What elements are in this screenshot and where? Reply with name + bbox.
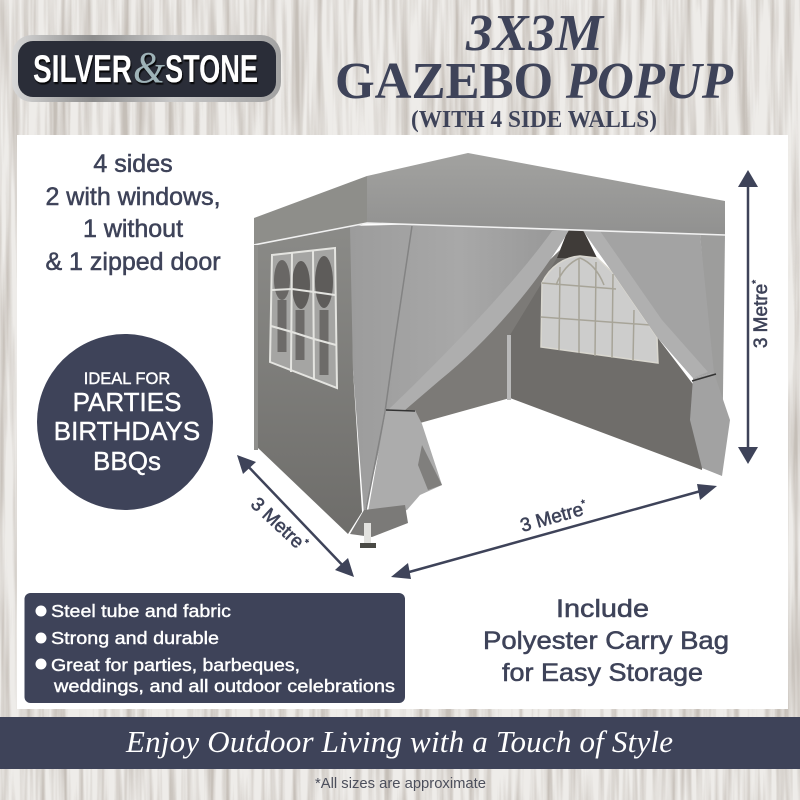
arrow: height: * — [751, 280, 762, 284]
support pole — [507, 335, 511, 400]
features list panel: Steel tube and fabric — [51, 601, 231, 621]
arrow: width: * — [580, 498, 587, 510]
interior back wall — [510, 230, 705, 470]
interior left wall — [400, 250, 560, 423]
left curtain skirt — [350, 505, 408, 537]
arrow: depth: 3 Metre — [246, 494, 308, 553]
features list panel: Strong and durable — [51, 628, 219, 648]
white trim line — [254, 223, 725, 245]
carry bag note — [483, 595, 729, 687]
curtain fold — [366, 226, 412, 510]
subtitle: with 4 side walls: (WITH 4 SIDE WALLS) — [411, 107, 657, 133]
arrow: height: 3 Metre — [751, 284, 772, 348]
logo: Silver & Stone: STONE — [165, 48, 258, 91]
badge: ideal for — [37, 334, 213, 510]
badge: ideal for: BIRTHDAYS — [54, 416, 200, 446]
features text: 2 with windows, — [45, 183, 221, 211]
left side window — [270, 248, 337, 388]
features list panel — [24, 593, 405, 703]
right curtain — [583, 230, 714, 378]
badge: ideal for: BBQs — [93, 446, 161, 476]
footnote: *All sizes are approximate — [315, 776, 486, 792]
badge: ideal for: PARTIES — [73, 387, 181, 417]
features text: 1 without — [83, 215, 183, 243]
logo: Silver & Stone: SILVER — [33, 48, 132, 91]
right curtain roll — [583, 230, 708, 378]
white content panel — [17, 135, 788, 709]
title: 3X3M: 3X3M — [465, 5, 605, 62]
right tie — [692, 374, 716, 381]
arrow: width: 3 Metre — [518, 499, 586, 537]
carry bag note: Polyester Carry Bag — [483, 627, 729, 655]
gazebo foot — [360, 523, 376, 548]
dark flap — [418, 445, 442, 490]
right outer panel — [700, 234, 725, 472]
curtain roll — [388, 230, 569, 410]
badge: ideal for: IDEAL FOR — [84, 370, 170, 388]
features text: 4 sides — [93, 150, 173, 178]
logo: Silver & Stone: & — [133, 43, 166, 92]
tagline banner: Enjoy Outdoor Living with a Touch of Style — [125, 724, 673, 759]
carry bag note: Include — [556, 595, 649, 623]
logo: Silver & Stone — [12, 35, 281, 102]
curtain tie — [386, 410, 415, 411]
front corner panel and left curtain — [350, 224, 569, 515]
features list panel: Great for parties, barbeques, — [51, 655, 300, 675]
arrow: depth: * — [300, 537, 311, 548]
left wall — [254, 223, 367, 534]
arrow: depth — [237, 455, 354, 577]
title: Gazebo Popup: GAZEBO POPUP — [335, 53, 734, 110]
features list panel: weddings, and all outdoor celebrations — [53, 676, 395, 696]
arrow: width — [391, 484, 717, 579]
interior roof shadow — [557, 230, 597, 258]
features text — [45, 150, 221, 276]
carry bag note: for Easy Storage — [502, 659, 703, 687]
left curtain tied bunch — [368, 410, 442, 520]
back wall window — [541, 256, 658, 363]
left pole — [254, 245, 258, 450]
arrow: height — [738, 170, 772, 464]
features text: & 1 zipped door — [45, 248, 221, 276]
roof left side — [254, 176, 367, 245]
roof front and top — [367, 153, 725, 235]
tagline banner — [0, 717, 800, 769]
gazebo illustration — [254, 153, 730, 548]
right curtain tied bunch — [690, 373, 730, 476]
